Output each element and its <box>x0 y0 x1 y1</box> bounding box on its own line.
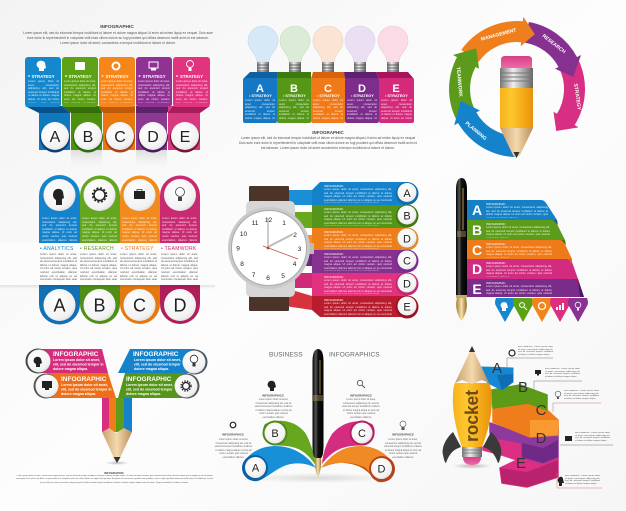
ribbon C purple: C <box>403 256 411 268</box>
ribbon stack: A <box>472 202 482 218</box>
icon: watch: 4 <box>293 261 297 268</box>
icon: pen <box>456 178 467 321</box>
ribbon stack: INFOGRAPHIC <box>486 242 505 246</box>
white band <box>0 243 215 285</box>
icon: watch <box>228 186 314 311</box>
column B: B <box>83 129 93 146</box>
ribbon D pink: INFOGRAPHIC <box>324 275 343 279</box>
ribbon A: A <box>403 188 411 200</box>
title: INFOGRAPHICS <box>329 352 380 358</box>
arc A: A <box>252 462 260 474</box>
panel: light bulbs on boxes <box>238 26 418 157</box>
band columns: • STRATEGY <box>121 246 154 252</box>
box D <box>344 72 379 123</box>
column E <box>168 57 210 152</box>
ribbon blue: INFOGRAPHIC <box>133 351 179 358</box>
box A <box>243 72 278 123</box>
column D: D <box>147 129 159 146</box>
icon: watch: 8 <box>240 261 244 268</box>
box B: • STRATEGY <box>283 94 306 98</box>
icon: watch: 7 <box>252 272 256 279</box>
crimson pill <box>160 176 200 324</box>
arc A <box>242 446 316 481</box>
intro text: Lorem ipsum elit, sed do eiusmod tempor incididunt ut labore et dolore magna aliqua Ut enim ad minim liquip ex nequat. Duis aute irure dolor in reprehenderit in voluptate velit esse cillum dolore eu fugi proident qui officia deserunt mollit anim id est laborum. Lorem ipsum dolor sit amet, consectetur a tempor incididunt ut labore et dolore. <box>23 31 213 45</box>
icon: rocket pencil <box>443 346 501 465</box>
box A: • STRATEGY <box>249 94 272 98</box>
panel: circular arrows with pencil <box>449 17 585 158</box>
box E: • STRATEGY <box>385 94 408 98</box>
ribbon D orange <box>285 228 418 250</box>
bottom letter circles: B <box>93 296 106 316</box>
text block: upper right <box>341 380 381 419</box>
ribbon pink: INFOGRAPHIC <box>53 351 99 358</box>
arrow: strategy: STRATEGY <box>572 83 582 111</box>
text block: upper right: INFOGRAPHICS <box>350 394 372 398</box>
callout: 4: INFOGRAPHIC Lorem ipsum dolor sit amet, consectetur adipiscing elit, sed do eiusmod tempor incididunt ut labore et dolore magna aliqua. <box>575 432 610 442</box>
bottom letter circles <box>44 289 196 321</box>
green pill <box>80 176 120 324</box>
stairs: D <box>536 430 547 447</box>
text block: lower left <box>214 422 253 458</box>
text block: lower right: INFOGRAPHICS <box>392 432 414 436</box>
ribbon pink: dolore magna aliqua. <box>53 367 88 371</box>
column A <box>25 57 70 152</box>
arrow: strategy <box>554 60 585 131</box>
callout: 1 <box>507 346 553 367</box>
panel: watch with ribbons <box>228 182 418 318</box>
ribbon blue: elit, sed do eiusmod tempor <box>134 362 181 366</box>
ribbon B: B <box>403 210 411 222</box>
column A: STRATEGY <box>32 74 55 79</box>
band columns <box>40 246 198 282</box>
icon: watch: 12 <box>265 217 272 224</box>
callout: 5 <box>557 473 602 488</box>
ribbon orange: Lorem ipsum dolor sit amet, <box>61 383 108 387</box>
column C <box>99 57 135 152</box>
ribbon B <box>285 204 418 228</box>
pin icons <box>495 298 588 322</box>
box B: B <box>290 83 298 95</box>
ribbon orange: elit, sed do eiusmod tempor in <box>61 388 112 392</box>
text block: lower left: INFOGRAPHICS <box>222 432 244 436</box>
icon: watch: 1 <box>282 220 286 227</box>
top icon circles <box>44 179 196 211</box>
callout: 2 <box>534 368 582 390</box>
panel: pencil with four ribbons <box>15 348 214 490</box>
band columns: • RESEARCH <box>80 246 114 252</box>
callout: 3 <box>553 390 601 412</box>
ribbon stack: INFOGRAPHIC <box>486 261 505 265</box>
band columns: • ANALYTICS <box>40 246 74 252</box>
ribbon blue: Lorem ipsum dolor sit amet, <box>134 358 181 362</box>
ribbon blue: dolore magna aliqua. <box>134 367 169 371</box>
icon: watch: 2 <box>293 232 297 239</box>
ribbon D pink <box>285 272 418 296</box>
icon: watch: 3 <box>298 246 302 253</box>
ribbon green: elit, sed do eiusmod tempor <box>126 388 173 392</box>
ribbon stack: INFOGRAPHIC <box>486 202 505 206</box>
ribbon C purple: INFOGRAPHIC <box>324 252 343 256</box>
box E <box>376 72 414 123</box>
column A: A <box>50 129 61 146</box>
arrow: research: RESEARCH <box>541 33 567 55</box>
text block: upper left: INFOGRAPHICS <box>262 394 284 398</box>
ribbon blue <box>118 349 208 374</box>
icon: pencil <box>102 398 132 465</box>
ribbon stack <box>467 200 584 297</box>
column B <box>62 57 103 152</box>
ribbon pink <box>26 348 108 374</box>
ribbon orange <box>34 373 116 398</box>
box E: E <box>392 83 400 95</box>
icon: watch: 6 <box>266 275 270 282</box>
arrow: management <box>461 17 535 62</box>
arc D <box>321 446 395 482</box>
text block: lower right <box>383 421 423 458</box>
text block: upper left <box>254 381 293 419</box>
column D <box>136 57 172 152</box>
heading: infographic: INFOGRAPHIC <box>312 130 345 135</box>
arrow: planning <box>454 101 515 157</box>
ribbon green: dolore magna aliqua. <box>126 392 161 396</box>
panel: four pill columns with band <box>0 175 215 324</box>
icon: rocket pencil: rocket <box>462 390 482 442</box>
text block: upper left: Lorem ipsum dolor sit amet, consectetur adipiscing elit, sed do eiusmod tempor incididunt ut labore et dolore magna aliqua ut enim ad minim veniam quis nostrud exercitation ullamco. <box>255 398 292 418</box>
ribbon D orange: INFOGRAPHIC <box>324 230 343 234</box>
stairs: C <box>536 402 547 419</box>
icon: watch: 5 <box>281 273 285 280</box>
ribbon orange: INFOGRAPHIC <box>61 376 107 383</box>
ribbon stack: D <box>472 261 482 277</box>
arrow: planning: PLANNING <box>464 121 488 142</box>
callout: 3: INFOGRAPHIC Lorem ipsum dolor sit amet, consectetur adipiscing elit, sed do eiusmod tempor incididunt ut labore et dolore magna aliqua. <box>564 390 599 400</box>
bottom letter circles: D <box>174 296 186 316</box>
callout: 1: INFOGRAPHIC Lorem ipsum dolor sit amet, consectetur adipiscing elit, sed do eiusmod tempor incididunt ut labore et dolore magna aliqua. <box>518 346 553 356</box>
ribbon D pink: D <box>403 278 411 290</box>
icon: watch: 10 <box>240 231 247 238</box>
arc B: B <box>271 428 279 440</box>
ribbon D orange: D <box>403 234 411 246</box>
title <box>269 352 380 358</box>
ribbon A: INFOGRAPHIC <box>324 184 343 188</box>
stairs: B <box>518 379 528 396</box>
text block: lower left: Lorem ipsum dolor sit amet, consectetur adipiscing elit, sed do eiusmod tempor incididunt ut labore et dolore magna aliqua ut enim ad minim veniam quis nostrud exercitation ullamco. <box>215 438 252 458</box>
callout: 5: INFOGRAPHIC Lorem ipsum dolor sit amet, consectetur adipiscing elit, sed do eiusmod tempor incididunt ut labore et dolore magna aliqua. <box>565 475 600 485</box>
ribbon E: E <box>403 302 411 314</box>
column B: STRATEGY <box>68 74 92 79</box>
bottom letter circles: C <box>133 296 146 316</box>
ribbon orange: dolore magna aliqua. <box>61 392 96 396</box>
caption text: Lorem ipsum dolor sit amet, consectetur adipiscing elit, sed do eiusmod tempor incididunt ut labore et dolore magna aliqua. Ut enim ad minim veniam, quis nostrud exercitation ullamco laboris nisi ut aliquip ex ea commodo consequat. Duis aute irure dolor in reprehenderit in voluptate velit esse cillum dolore eu fugiat nulla pariatur. Excepteur sint occaecat cupidatat non proident, sunt in culpa qui officia deserunt mollit anim id est laborum. Lorem ipsum dolor sit amet consectetur adipiscing elit sed do eiusmod tempor incididunt ut labore et dolore magna aliqua enim ad minim. Tempor incididunt ut labore et dolore. <box>16 475 213 484</box>
arrow: management: MANAGEMENT <box>480 27 517 43</box>
callout: 2: INFOGRAPHIC Lorem ipsum dolor sit amet, consectetur adipiscing elit, sed do eiusmod tempor incididunt ut labore et dolore magna aliqua. <box>545 368 580 378</box>
arc B <box>262 420 316 466</box>
ribbon stack: C <box>472 242 482 258</box>
band columns: • TEAMWORK <box>161 246 197 252</box>
panel: business infographics pen and arcs <box>214 349 423 483</box>
ribbon green: INFOGRAPHIC <box>126 376 172 383</box>
panel: pencil rocket with stairs <box>443 346 613 488</box>
icon: pencil <box>500 56 533 158</box>
ribbon B: INFOGRAPHIC <box>324 207 343 211</box>
arc C: C <box>358 428 366 440</box>
ribbon stack: B <box>472 222 482 238</box>
blue pill <box>39 175 80 324</box>
box C: • STRATEGY <box>317 94 340 98</box>
stairs <box>482 360 558 487</box>
stairs: E <box>516 455 526 472</box>
ribbon green: Lorem ipsum dolor sit amet, <box>126 383 173 387</box>
text block: upper right: Lorem ipsum dolor sit amet, consectetur adipiscing elit, sed do eiusmod tempor incididunt ut labore et dolore magna aliqua ut enim ad minim veniam quis nostrud exercitation ullamco. <box>342 398 380 418</box>
column E: E <box>180 129 190 146</box>
text block: lower right: Lorem ipsum dolor sit amet, consectetur adipiscing elit, sed do eiusmod tempor incididunt ut labore et dolore magna aliqua ut enim ad minim veniam quis nostrud exercitation ullamco. <box>384 438 422 458</box>
ribbon C purple <box>285 250 418 273</box>
box A: A <box>256 83 264 95</box>
column E: STRATEGY <box>180 74 203 79</box>
icon: pen <box>312 349 324 478</box>
arrow: teamwork <box>449 48 479 125</box>
ribbon pink: elit, sed do eiusmod tempor in <box>53 362 104 366</box>
box B <box>277 72 311 123</box>
ribbon pink: Lorem ipsum dolor sit amet, <box>53 358 100 362</box>
box C: C <box>324 83 332 95</box>
ribbon stack: INFOGRAPHIC <box>486 281 505 285</box>
heading: infographic: INFOGRAPHIC <box>104 471 124 475</box>
icon: watch: 9 <box>236 246 240 252</box>
arc D: D <box>378 464 386 476</box>
heading: infographic: INFOGRAPHIC <box>100 24 134 30</box>
caption text: Lorem ipsum elit, sed do eiusmod tempor incididunt ut labore et dolore magna aliqua Ut enim ad minim liquip ex nequat Duis aute irure dolor in reprehenderit in voluptate velit esse cillum dolore eu fugi proident qui officia deserunt mollit anim id est laborum. Lorem ipsum dolor sit amet consectetur a tempor incididunt ut labore et dolore. <box>239 136 417 150</box>
column C: STRATEGY <box>106 74 129 79</box>
icon: watch: 11 <box>252 220 259 227</box>
ribbon E <box>285 288 418 318</box>
arrow: teamwork: TEAMWORK <box>455 67 463 98</box>
arc C <box>322 420 375 464</box>
column D: STRATEGY <box>142 74 166 79</box>
callout: 4 <box>560 432 613 445</box>
orange pill <box>120 176 160 324</box>
ribbon stack: E <box>472 281 482 297</box>
bottom letter circles: A <box>53 296 66 316</box>
stairs: A <box>492 360 502 377</box>
panel: pen with stacked ribbons <box>456 178 588 322</box>
title: BUSINESS <box>269 352 303 358</box>
column C: C <box>114 129 126 146</box>
ribbon A <box>285 182 418 205</box>
ribbon stack: INFOGRAPHIC <box>486 222 505 226</box>
ribbon E: INFOGRAPHIC <box>324 298 343 302</box>
box D: • STRATEGY <box>351 94 374 98</box>
box D: D <box>358 83 366 95</box>
arrow: research <box>525 22 581 77</box>
panel: five column tabs with letters <box>22 24 214 170</box>
box C <box>311 72 345 123</box>
ribbon green <box>118 373 200 398</box>
icon: bulbs <box>248 26 408 75</box>
